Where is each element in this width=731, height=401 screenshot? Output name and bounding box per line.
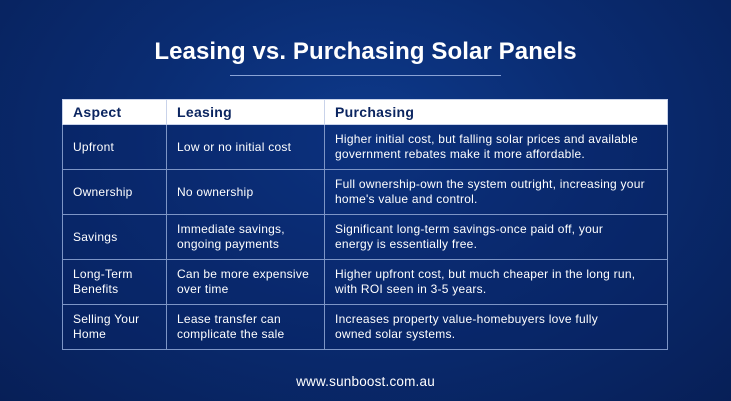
comparison table: home's value and control. [335,192,478,206]
comparison table: Full ownership-own the system outright, increasing your [335,177,645,191]
comparison table: Purchasing [335,104,414,120]
comparison table: Low or no initial cost [177,140,291,154]
comparison table: owned solar systems. [335,327,455,341]
comparison table [62,99,668,350]
comparison table: government rebates make it more affordable. [335,147,585,161]
comparison table: Higher upfront cost, but much cheaper in the long run, [335,267,635,281]
comparison table: Aspect [73,104,121,120]
comparison table: Leasing [177,104,232,120]
comparison table: Higher initial cost, but falling solar prices and available [335,132,638,146]
comparison table: complicate the sale [177,327,284,341]
comparison table: Immediate savings, [177,222,285,236]
comparison table: Selling Your [73,312,139,326]
comparison table: energy is essentially free. [335,237,477,251]
comparison table: over time [177,282,229,296]
comparison table: Increases property value-homebuyers love fully [335,312,598,326]
comparison table: with ROI seen in 3-5 years. [335,282,486,296]
comparison table: Benefits [73,282,118,296]
comparison table: Long-Term [73,267,133,281]
title: Leasing vs. Purchasing Solar Panels [154,38,577,65]
comparison table: Can be more expensive [177,267,309,281]
comparison table: Upfront [73,140,114,154]
comparison table: No ownership [177,184,253,198]
comparison table: Lease transfer can [177,312,281,326]
comparison table: Significant long-term savings-once paid off, your [335,222,603,236]
footer url: www.sunboost.com.au [296,374,435,389]
comparison table: Savings [73,230,117,244]
comparison table: Ownership [73,184,133,198]
comparison table: ongoing payments [177,237,279,251]
comparison table: Home [73,327,106,341]
